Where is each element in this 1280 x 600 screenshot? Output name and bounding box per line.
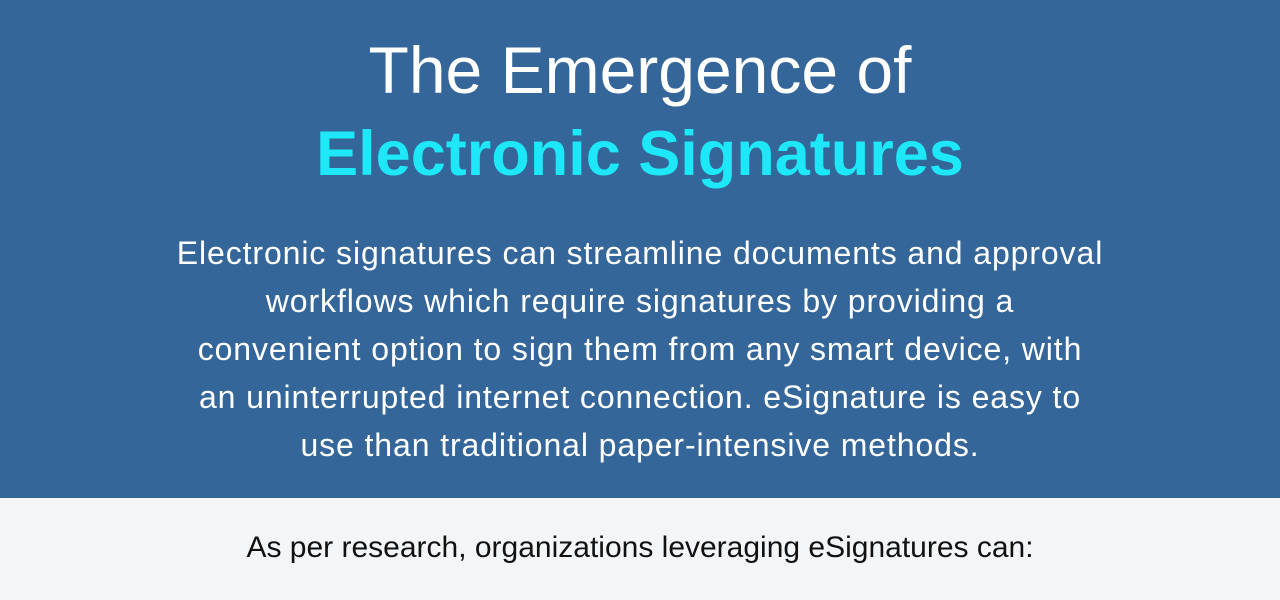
intro paragraph: convenient option to sign them from any smart device, with <box>198 331 1082 367</box>
intro paragraph: workflows which require signatures by providing a <box>266 283 1014 319</box>
intro paragraph: an uninterrupted internet connection. eSignature is easy to <box>199 379 1081 415</box>
subheading: As per research, organizations leveraging eSignatures can: <box>246 531 1034 564</box>
title line 2: Electronic Signatures <box>316 119 964 189</box>
intro paragraph <box>177 235 1103 463</box>
intro paragraph: use than traditional paper-intensive methods. <box>300 427 980 463</box>
intro paragraph: Electronic signatures can streamline documents and approval <box>177 235 1103 271</box>
title line 1: The Emergence of <box>369 33 911 107</box>
